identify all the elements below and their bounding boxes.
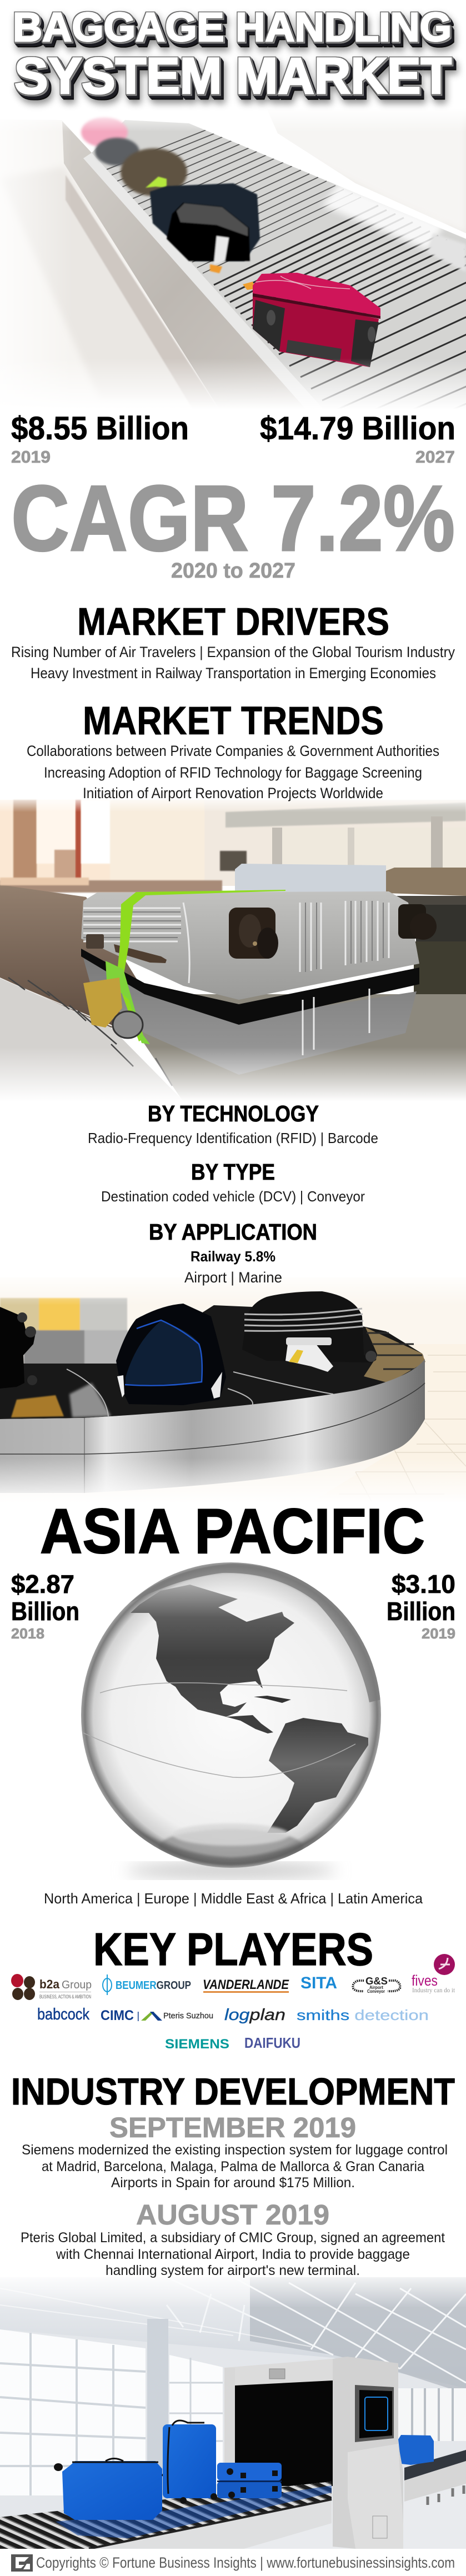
green tag strap (106, 961, 150, 1044)
logo: daifuku: DAIFUKU (244, 2034, 300, 2051)
red suitcase (243, 273, 380, 367)
upper rim land (131, 1563, 381, 1702)
rear wheel (398, 904, 437, 940)
logo: cimc pteris suzhou: CIMC (101, 2008, 134, 2023)
market drivers (11, 600, 455, 681)
scanner (224, 2357, 403, 2549)
front conveyor (0, 2482, 332, 2549)
logo: g&s airport conveyor: Conveyor (367, 1989, 385, 1994)
logo: sita: SITA (300, 1974, 337, 1992)
front wheel (229, 908, 278, 959)
logo: b2a group: Group (62, 1979, 92, 1991)
segment: by technology (88, 1101, 378, 1146)
pouch (113, 1011, 143, 1038)
photo: baggage conveyor with suitcases (6, 117, 466, 408)
logo: g&s airport conveyor: Airport (369, 1985, 383, 1990)
tunnel (234, 2380, 333, 2486)
2019 value: $8.55 Billion (11, 410, 189, 447)
photo: airport baggage scanner (0, 2277, 466, 2549)
september text: Airports in Spain for around $175 Million. (111, 2175, 355, 2191)
right suitcase (398, 2435, 434, 2465)
photo: silver suitcase on carousel (0, 795, 466, 1104)
2027 value: $14.79 Billion (260, 410, 455, 447)
logo: cimc pteris suzhou: Pteris Suzhou (163, 2011, 213, 2021)
south america (267, 1718, 368, 1833)
stacked blue suitcases (217, 2463, 282, 2498)
tunnel header (224, 2359, 333, 2385)
large blue suitcase (54, 2458, 167, 2520)
logo: vanderlande: VANDERLANDE (203, 1977, 289, 1992)
suitcase body upper (81, 891, 419, 1000)
2027 label: 2027 (415, 447, 455, 467)
asia pacific 2018 value (11, 1570, 79, 1642)
black hard case (150, 183, 260, 261)
heading: BY TECHNOLOGY (148, 1101, 319, 1126)
logo: cimc pteris suzhou (101, 2008, 213, 2023)
segment: by application (149, 1219, 317, 1286)
photo: baggage carousel (0, 1271, 466, 1503)
globe sphere (81, 1562, 381, 1868)
august heading: AUGUST 2019 (136, 2199, 329, 2231)
segment: by type (101, 1159, 365, 1205)
pink bag (81, 117, 128, 147)
centre windows (169, 2355, 223, 2494)
yellow tag (83, 978, 122, 1028)
vent (373, 2516, 387, 2538)
navy backpack (116, 1304, 226, 1405)
CAGR callout (11, 466, 455, 583)
floor (244, 2460, 466, 2549)
company logos (11, 1954, 455, 2052)
2019 label: 2019 (11, 447, 51, 467)
background brown bag (386, 868, 466, 896)
logo: b2a group: b2a (39, 1977, 60, 1991)
control panel (269, 2369, 285, 2379)
front column (333, 2357, 403, 2549)
logo: b2a group (11, 1974, 92, 2000)
options: Airport | Marine (184, 1269, 282, 1286)
globe ground shadow (126, 1863, 337, 1878)
logo: g&s airport conveyor: G&S (365, 1976, 388, 1987)
heading: MARKET DRIVERS (77, 600, 389, 643)
september text: at Madrid, Barcelona, Malaga, Palma de Mallorca & Gran Canaria (42, 2159, 424, 2174)
suitcase ribs (83, 901, 389, 1055)
pillar (147, 2319, 168, 2502)
heading: MARKET TRENDS (83, 699, 384, 743)
inner wall (0, 1298, 133, 1365)
august text: handling system for airport's new terminal. (106, 2263, 360, 2278)
logo: logplan: logplan (224, 2006, 285, 2024)
globe seams (83, 1683, 355, 1777)
logo: beumer group: BEUMERGROUP (116, 1979, 191, 1992)
logo: fives: Industry can do it (412, 1986, 455, 1994)
key players heading: KEY PLAYERS (93, 1923, 373, 1975)
suitcase handle (114, 944, 167, 963)
heading: BY TYPE (191, 1159, 275, 1185)
suitcase lock (86, 934, 104, 949)
right windows (398, 2388, 466, 2441)
CAGR period: 2020 to 2027 (171, 559, 295, 583)
left column (224, 2368, 235, 2473)
logo: babcock: babcock (37, 2006, 89, 2023)
august text (21, 2230, 445, 2278)
logo: smiths detection: smiths detection (297, 2007, 429, 2023)
september text: Siemens modernized the existing inspection system for luggage control (22, 2142, 448, 2158)
left bag (0, 1307, 37, 1389)
logo: fives: fives (412, 1972, 438, 1989)
central america (226, 1715, 273, 1733)
logo: b2a group: BUSINESS, ACTION & AMBITION (39, 1994, 91, 1999)
railway share: Railway 5.8% (191, 1248, 275, 1265)
industry development (11, 2071, 455, 2278)
region heading: asia pacific: ASIA PACIFIC (40, 1496, 425, 1567)
suitcase black seam (81, 949, 419, 1025)
upper wall and roof (0, 2277, 466, 2388)
logo: fives (412, 1954, 455, 1994)
august text: with Chennai International Airport, India to provide baggage (56, 2247, 410, 2262)
asia pacific 2018 value: Billion (11, 1597, 79, 1626)
grey bag (95, 138, 139, 166)
asia pacific 2019 value (387, 1570, 455, 1642)
logo: beumer group (103, 1974, 191, 1995)
suitcase body lower (83, 958, 417, 1075)
green strap (117, 890, 285, 1041)
title line 2: SYSTEM MARKET (14, 48, 452, 104)
asia pacific 2018 value: $2.87 (11, 1570, 74, 1598)
asia pacific 2019 value: Billion (387, 1597, 455, 1626)
market size stats (11, 410, 455, 467)
asia pacific 2019 value: $3.10 (392, 1570, 455, 1598)
carousel rim (0, 1359, 425, 1493)
north america (131, 1585, 294, 1717)
options: Radio-Frequency Identification (RFID) | Barcode (88, 1130, 378, 1146)
green tag (146, 177, 167, 188)
other regions: North America | Europe | Middle East & Africa | Latin America (44, 1890, 423, 1907)
brown bag (121, 148, 187, 196)
black soft case (167, 203, 250, 273)
globe base reflection (159, 1829, 303, 1865)
asia pacific 2019 value: 2019 (422, 1625, 455, 1642)
monitor (355, 2385, 394, 2442)
options: Destination coded vehicle (DCV) | Conveyor (101, 1188, 365, 1205)
august text: Pteris Global Limited, a subsidiary of CMIC Group, signed an agreement (21, 2230, 445, 2246)
trends line 3: Initiation of Airport Renovation Projects Worldwide (83, 785, 383, 801)
tall blue suitcase (163, 2420, 217, 2504)
title (13, 5, 452, 104)
background grey case (235, 864, 386, 893)
asia pacific 2018 value: 2018 (11, 1625, 44, 1642)
logo: siemens: SIEMENS (165, 2037, 229, 2052)
striped black case (242, 1291, 377, 1372)
logo: g&s airport conveyor (353, 1976, 400, 1994)
footer (11, 2554, 455, 2572)
caribbean islands (254, 1696, 291, 1703)
trends line 2: Increasing Adoption of RFID Technology for Baggage Screening (44, 764, 422, 781)
heading: BY APPLICATION (149, 1219, 317, 1245)
september heading: SEPTEMBER 2019 (109, 2112, 356, 2143)
title line 1: BAGGAGE HANDLING (13, 5, 452, 50)
carousel surface (0, 1305, 423, 1419)
left windows (0, 2329, 146, 2495)
glass globe (81, 1562, 381, 1878)
september text (22, 2142, 448, 2191)
footer logo (11, 2554, 33, 2572)
right conveyor (404, 2450, 466, 2505)
market trends (27, 699, 439, 801)
